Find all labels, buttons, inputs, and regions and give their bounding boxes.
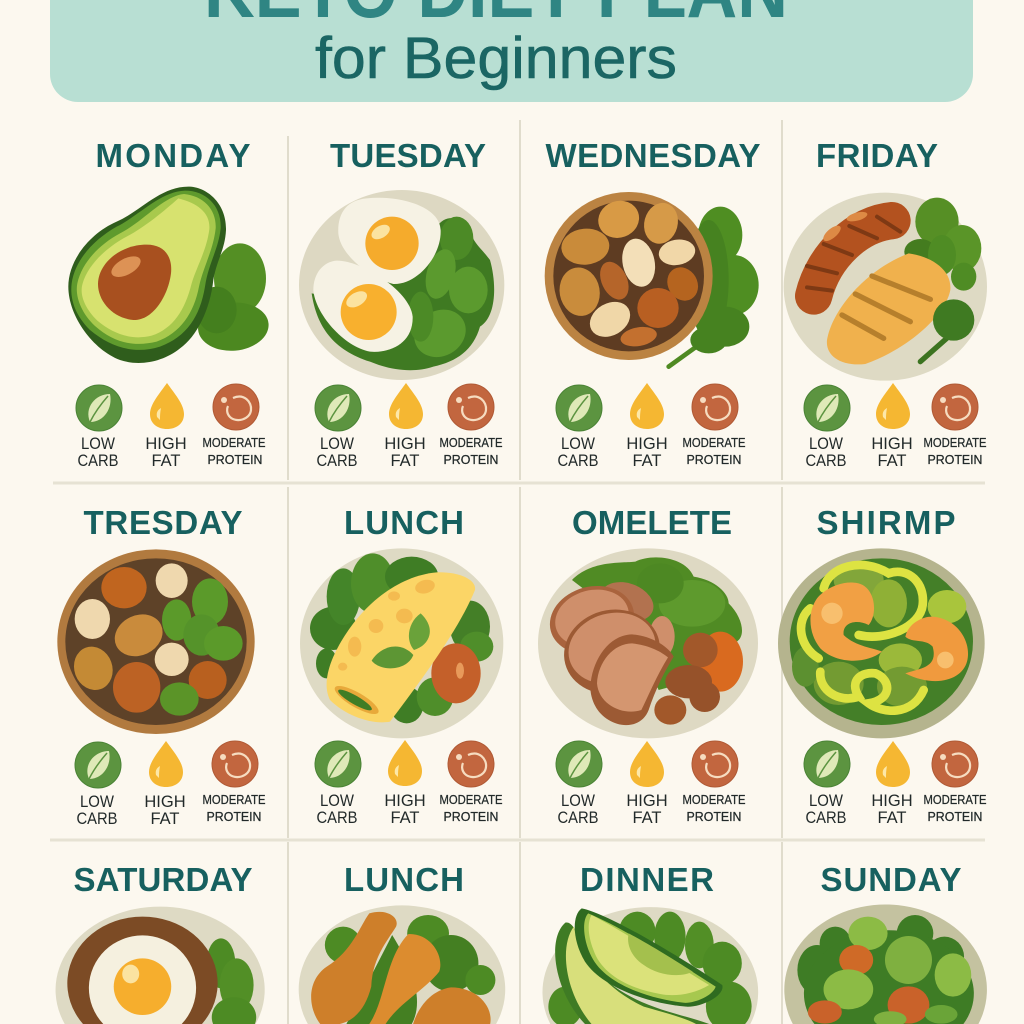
panel: monday	[68, 137, 271, 470]
panel: tresday	[57, 504, 265, 828]
icon: moderate protein: PROTEIN	[686, 810, 742, 824]
illustration: omelette with spinach	[300, 548, 503, 738]
icon: low carb	[556, 741, 602, 827]
icon: low carb: LOW	[80, 793, 114, 811]
heading: tresday: TRESDAY	[84, 504, 242, 541]
icon: high fat: FAT	[151, 452, 181, 470]
icon: moderate protein	[202, 384, 266, 467]
illustration: egg in mushroom	[56, 907, 265, 1024]
icon: high fat	[626, 383, 668, 470]
panel: lunch row two	[300, 504, 503, 827]
icon: low carb: LOW	[561, 792, 595, 810]
heading: saturday: SATURDAY	[74, 861, 252, 898]
icon: moderate protein: MODERATE	[682, 793, 746, 807]
icon: low carb	[556, 385, 602, 470]
icon: high fat	[871, 383, 913, 470]
illustration: sausage and grilled chicken	[784, 193, 987, 381]
icon: high fat	[384, 740, 426, 827]
icon: moderate protein	[440, 384, 502, 467]
panel: tuesday	[299, 137, 504, 470]
icon: moderate protein	[682, 741, 746, 824]
illustration: sliced avocado on spinach	[542, 907, 758, 1024]
icon: moderate protein	[924, 384, 986, 467]
icon: low carb: CARB	[558, 452, 598, 470]
icon: low carb: LOW	[320, 435, 354, 453]
icon: moderate protein: PROTEIN	[928, 810, 982, 824]
icon: high fat	[145, 383, 187, 470]
icon: moderate protein: MODERATE	[202, 436, 266, 450]
subtitle: for Beginners	[315, 26, 677, 91]
heading: friday: FRIDAY	[816, 137, 938, 174]
panel: sunday	[784, 861, 987, 1024]
heading: dinner: DINNER	[580, 861, 714, 898]
heading: sunday: SUNDAY	[820, 861, 962, 898]
icon: high fat: FAT	[877, 809, 907, 827]
icon: moderate protein: MODERATE	[924, 793, 986, 807]
illustration: bowl of nuts with spinach	[545, 192, 759, 367]
heading: tuesday: TUESDAY	[330, 137, 486, 174]
panel: saturday	[56, 861, 265, 1024]
panel: shirmp	[778, 504, 986, 827]
illustration: sliced meat and mushrooms	[538, 548, 758, 738]
icon: moderate protein	[924, 741, 986, 824]
icon: moderate protein: PROTEIN	[444, 453, 498, 467]
icon: low carb: CARB	[806, 809, 846, 827]
icon: moderate protein: PROTEIN	[208, 453, 262, 467]
illustration: chicken drumsticks	[299, 905, 505, 1024]
icon: low carb	[315, 741, 361, 827]
icon: high fat: HIGH	[144, 793, 186, 811]
icon: moderate protein: MODERATE	[440, 436, 502, 450]
icon: moderate protein	[682, 384, 746, 467]
icon: moderate protein: MODERATE	[682, 436, 746, 450]
icon: low carb: LOW	[809, 792, 843, 810]
icon: high fat: HIGH	[626, 792, 668, 810]
icon: low carb	[804, 385, 850, 470]
icon: high fat: FAT	[390, 809, 420, 827]
icon: low carb	[315, 385, 361, 470]
panel: omelete	[538, 504, 758, 827]
icon: moderate protein	[202, 741, 266, 824]
icon: high fat: FAT	[390, 452, 420, 470]
icon: low carb: CARB	[78, 452, 118, 470]
icon: high fat: FAT	[632, 452, 662, 470]
icon: low carb: CARB	[806, 452, 846, 470]
illustration: avocado with spinach	[68, 187, 271, 363]
icon: moderate protein: MODERATE	[924, 436, 986, 450]
illustration: green salad with tomato	[784, 904, 987, 1024]
panel: friday	[784, 137, 987, 470]
icon: low carb: CARB	[316, 452, 358, 470]
illustration: eggs with spinach	[299, 190, 504, 380]
icon: high fat	[384, 383, 426, 470]
icon: high fat: FAT	[150, 810, 180, 828]
icon: high fat	[144, 741, 186, 828]
icon: high fat	[871, 741, 913, 827]
heading: shirmp: SHIRMP	[816, 504, 956, 541]
icon: high fat: HIGH	[384, 435, 426, 453]
header banner	[50, 0, 973, 102]
icon: low carb: CARB	[558, 809, 598, 827]
icon: moderate protein: PROTEIN	[206, 810, 262, 824]
icon: moderate protein: PROTEIN	[444, 810, 498, 824]
icon: moderate protein: MODERATE	[202, 793, 266, 807]
heading: monday: MONDAY	[96, 137, 250, 174]
icon: high fat: HIGH	[871, 792, 913, 810]
illustration: shrimp salad	[778, 548, 985, 738]
icon: moderate protein: PROTEIN	[928, 453, 982, 467]
icon: low carb	[76, 385, 122, 470]
icon: high fat	[626, 741, 668, 827]
icon: low carb: LOW	[320, 792, 354, 810]
heading: lunch: LUNCH	[344, 861, 464, 898]
icon: low carb: LOW	[81, 435, 115, 453]
icon: low carb: LOW	[809, 435, 843, 453]
icon: high fat: FAT	[877, 452, 907, 470]
icon: moderate protein: MODERATE	[440, 793, 502, 807]
icon: moderate protein	[440, 741, 502, 824]
panel: dinner	[542, 861, 758, 1024]
icon: high fat: FAT	[632, 809, 662, 827]
panel: wednesday	[545, 137, 760, 470]
icon: high fat: HIGH	[626, 435, 668, 453]
panel: lunch row three	[299, 861, 505, 1024]
icon: low carb: CARB	[76, 810, 118, 828]
heading: wednesday: WEDNESDAY	[546, 137, 760, 174]
heading: lunch: LUNCH	[344, 504, 464, 541]
icon: low carb	[804, 741, 850, 827]
illustration: bowl of nuts and spinach	[57, 549, 255, 734]
icon: low carb: CARB	[316, 809, 358, 827]
icon: high fat: HIGH	[145, 435, 187, 453]
icon: low carb: LOW	[561, 435, 595, 453]
icon: low carb	[75, 742, 121, 828]
icon: high fat: HIGH	[384, 792, 426, 810]
heading: omelete: OMELETE	[572, 504, 732, 541]
icon: moderate protein: PROTEIN	[686, 453, 742, 467]
icon: high fat: HIGH	[871, 435, 913, 453]
